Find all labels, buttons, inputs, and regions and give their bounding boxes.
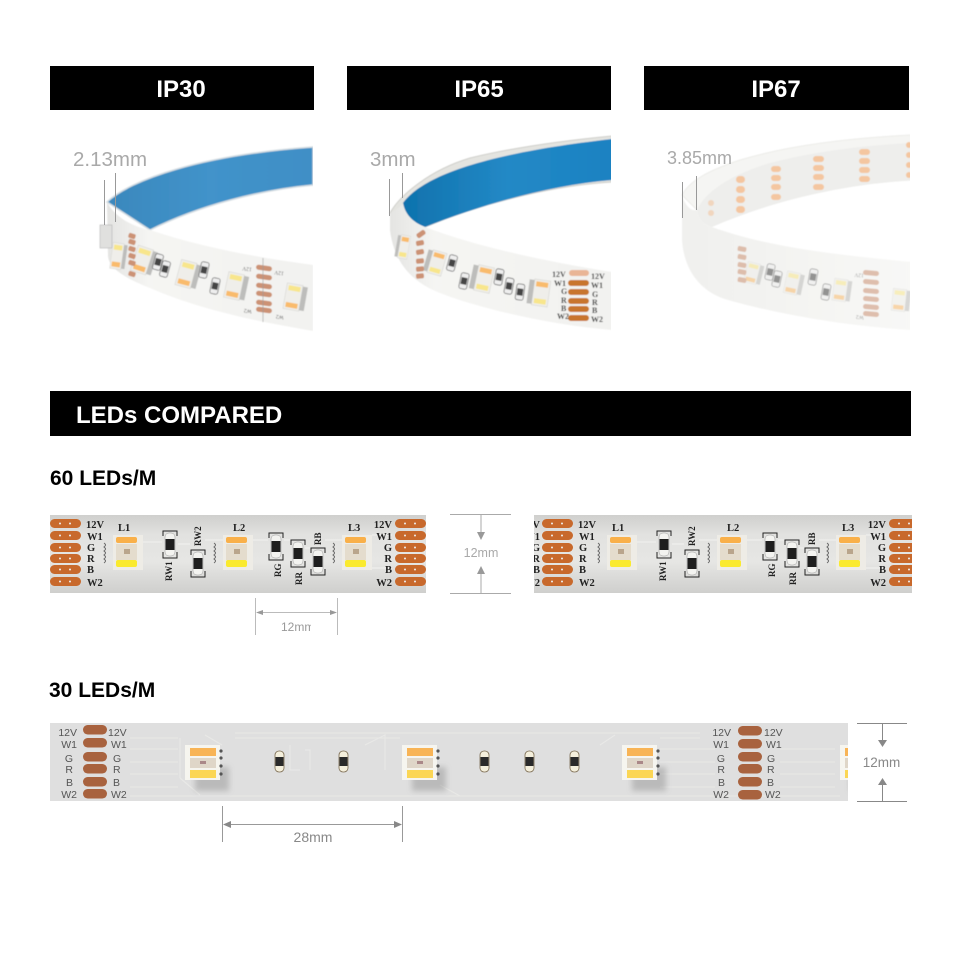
strip: 60 LEDs/M left segment: W2 [87, 578, 103, 589]
strip: 30 LEDs/M: B [718, 777, 725, 789]
strip: 60 LEDs/M right segment [522, 515, 920, 593]
strip: 60 LEDs/M right segment: W2 [579, 578, 595, 589]
strip: 60 LEDs/M right segment: 12V [522, 520, 540, 531]
strip: 30 LEDs/M: W2 [765, 789, 781, 801]
strip: 60 LEDs/M left segment: L2 [233, 523, 245, 534]
dimension: 12mm strip width (30 LEDs/M): 12mm [863, 755, 900, 770]
label: 3mm thickness: 3mm [370, 148, 416, 171]
strip: 60 LEDs/M left segment: RB [313, 532, 323, 545]
panel: IP30 header: IP30 [156, 76, 206, 103]
strip: 60 LEDs/M right segment: 12V [868, 520, 886, 531]
strip: 30 LEDs/M: B [66, 777, 73, 789]
strip: 60 LEDs/M right segment: W2 [870, 578, 886, 589]
strip: 60 LEDs/M left segment: 12V [374, 520, 392, 531]
strip: 30 LEDs/M: G [717, 753, 725, 765]
strip: 30 LEDs/M: 12V [58, 727, 77, 739]
strip: 60 LEDs/M right segment: RB [807, 532, 817, 545]
strip: 30 LEDs/M: B [113, 777, 120, 789]
photo: IP65 LED strip: G [561, 287, 567, 296]
strip: 30 LEDs/M: W1 [111, 739, 127, 751]
heading: 30 LEDs/M: 30 LEDs/M [49, 679, 155, 702]
strip: 60 LEDs/M right segment: R [878, 554, 886, 565]
strip: 30 LEDs/M: W2 [713, 789, 729, 801]
strip: 60 LEDs/M right segment: B [579, 565, 586, 576]
strip: 60 LEDs/M left segment: B [385, 565, 392, 576]
strip: 60 LEDs/M left segment: B [87, 565, 94, 576]
strip: 30 LEDs/M: W2 [61, 789, 77, 801]
strip: 60 LEDs/M left segment: L1 [118, 523, 130, 534]
strip: 60 LEDs/M right segment: RW1 [658, 561, 668, 581]
strip: 30 LEDs/M: G [65, 753, 73, 765]
photo: IP67 LED strip: W2 [855, 313, 864, 320]
strip: 30 LEDs/M: G [113, 753, 121, 765]
dimension: 12mm LED spacing: 12mm [281, 620, 314, 634]
dimension: 28mm LED spacing [222, 806, 402, 845]
strip: 60 LEDs/M right segment: 12V [578, 520, 596, 531]
strip: 30 LEDs/M: W1 [766, 739, 782, 751]
strip: 60 LEDs/M left segment: R [384, 554, 392, 565]
photo: IP30 LED strip: 12V [242, 265, 252, 272]
strip: 60 LEDs/M left segment: W1 [87, 532, 103, 543]
label: 2.13mm thickness [73, 148, 147, 225]
strip: 30 LEDs/M: W1 [61, 739, 77, 751]
photo: IP65 LED strip: B [592, 306, 598, 315]
strip: 60 LEDs/M right segment: W2 [524, 578, 540, 589]
strip: 60 LEDs/M right segment: L3 [842, 523, 854, 534]
strip: 60 LEDs/M right segment: L2 [727, 523, 739, 534]
strip: 60 LEDs/M right segment: W1 [870, 532, 886, 543]
strip: 60 LEDs/M right segment: R [532, 554, 540, 565]
strip: 30 LEDs/M [50, 723, 884, 801]
dimension: 12mm strip width: 12mm [464, 546, 498, 560]
section banner: LEDs compared [50, 391, 911, 436]
dimension: 12mm strip width (30 LEDs/M) [857, 723, 907, 802]
strip: 60 LEDs/M right segment: B [533, 565, 540, 576]
strip: 30 LEDs/M: 12V [764, 727, 783, 739]
strip: 30 LEDs/M: W1 [713, 739, 729, 751]
label: 3.85mm thickness: 3.85mm [667, 148, 732, 168]
photo: IP65 LED strip: R [592, 298, 598, 307]
photo: IP65 LED strip: 12V [552, 270, 566, 279]
strip: 60 LEDs/M left segment: L3 [348, 523, 360, 534]
strip: 60 LEDs/M right segment: RW2 [687, 526, 697, 546]
strip: 60 LEDs/M right segment: B [879, 565, 886, 576]
heading: 60 LEDs/M: 60 LEDs/M [50, 467, 156, 490]
label: 2.13mm thickness: 2.13mm [73, 148, 147, 171]
photo: IP65 LED strip: G [592, 290, 598, 299]
strip: 60 LEDs/M right segment: R [579, 554, 587, 565]
dimension: 12mm strip width [450, 514, 511, 594]
panel: IP30 header [50, 66, 314, 110]
strip: 60 LEDs/M left segment: RW1 [164, 561, 174, 581]
label: 3mm thickness [370, 148, 416, 216]
photo: IP65 LED strip: W2 [557, 312, 569, 321]
panel: IP67 header [644, 66, 909, 110]
strip: 60 LEDs/M left segment: G [87, 543, 95, 554]
strip: 30 LEDs/M: 12V [712, 727, 731, 739]
strip: 30 LEDs/M: B [767, 777, 774, 789]
strip: 30 LEDs/M: 12V [108, 727, 127, 739]
strip: 60 LEDs/M left segment: 12V [86, 520, 104, 531]
strip: 60 LEDs/M right segment: RR [788, 572, 798, 585]
strip: 60 LEDs/M left segment: G [384, 543, 392, 554]
panel: IP65 header [347, 66, 611, 110]
strip: 60 LEDs/M right segment: G [532, 543, 540, 554]
photo: IP65 LED strip: W2 [591, 315, 603, 324]
label: 3.85mm thickness [667, 148, 732, 218]
strip: 30 LEDs/M: R [113, 764, 121, 776]
photo: IP65 LED strip: 12V [591, 272, 605, 281]
photo: IP30 LED strip [100, 147, 313, 331]
strip: 60 LEDs/M right segment: RG [767, 564, 777, 577]
dimension: 28mm LED spacing: 28mm [294, 829, 332, 845]
strip: 60 LEDs/M right segment: G [878, 543, 886, 554]
photo: IP30 LED strip: W2 [243, 307, 252, 314]
strip: 60 LEDs/M left segment: RG [273, 564, 283, 577]
photo: IP65 LED strip [390, 136, 612, 330]
photo: IP67 LED strip [682, 135, 912, 330]
strip: 60 LEDs/M right segment: W1 [579, 532, 595, 543]
strip: 60 LEDs/M left segment: RW2 [193, 526, 203, 546]
dimension: 12mm LED spacing [256, 598, 338, 635]
strip: 60 LEDs/M right segment: L1 [612, 523, 624, 534]
strip: 30 LEDs/M: G [767, 753, 775, 765]
photo: IP67 LED strip: 12V [854, 271, 864, 278]
photo: IP65 LED strip: B [561, 304, 567, 313]
strip: 60 LEDs/M right segment: G [579, 543, 587, 554]
strip: 30 LEDs/M: R [65, 764, 73, 776]
photo: IP30 LED strip: W2 [275, 313, 284, 320]
panel: IP65 header: IP65 [454, 76, 504, 103]
strip: 60 LEDs/M left segment: R [87, 554, 95, 565]
strip: 30 LEDs/M: W2 [111, 789, 127, 801]
strip: 30 LEDs/M: R [767, 764, 775, 776]
photo: IP65 LED strip: W1 [591, 281, 603, 290]
photo: IP65 LED strip: W1 [554, 279, 566, 288]
strip: 60 LEDs/M right segment: W1 [524, 532, 540, 543]
photo: IP65 LED strip: R [561, 296, 567, 305]
strip: 60 LEDs/M left segment [50, 515, 426, 593]
strip: 60 LEDs/M left segment: W1 [376, 532, 392, 543]
strip: 60 LEDs/M left segment: RR [294, 572, 304, 585]
strip: 30 LEDs/M: R [717, 764, 725, 776]
panel: IP67 header: IP67 [751, 76, 801, 103]
photo: IP30 LED strip: 12V [274, 269, 284, 276]
strip: 60 LEDs/M left segment: W2 [376, 578, 392, 589]
section banner: LEDs compared: LEDs COMPARED [76, 402, 282, 429]
